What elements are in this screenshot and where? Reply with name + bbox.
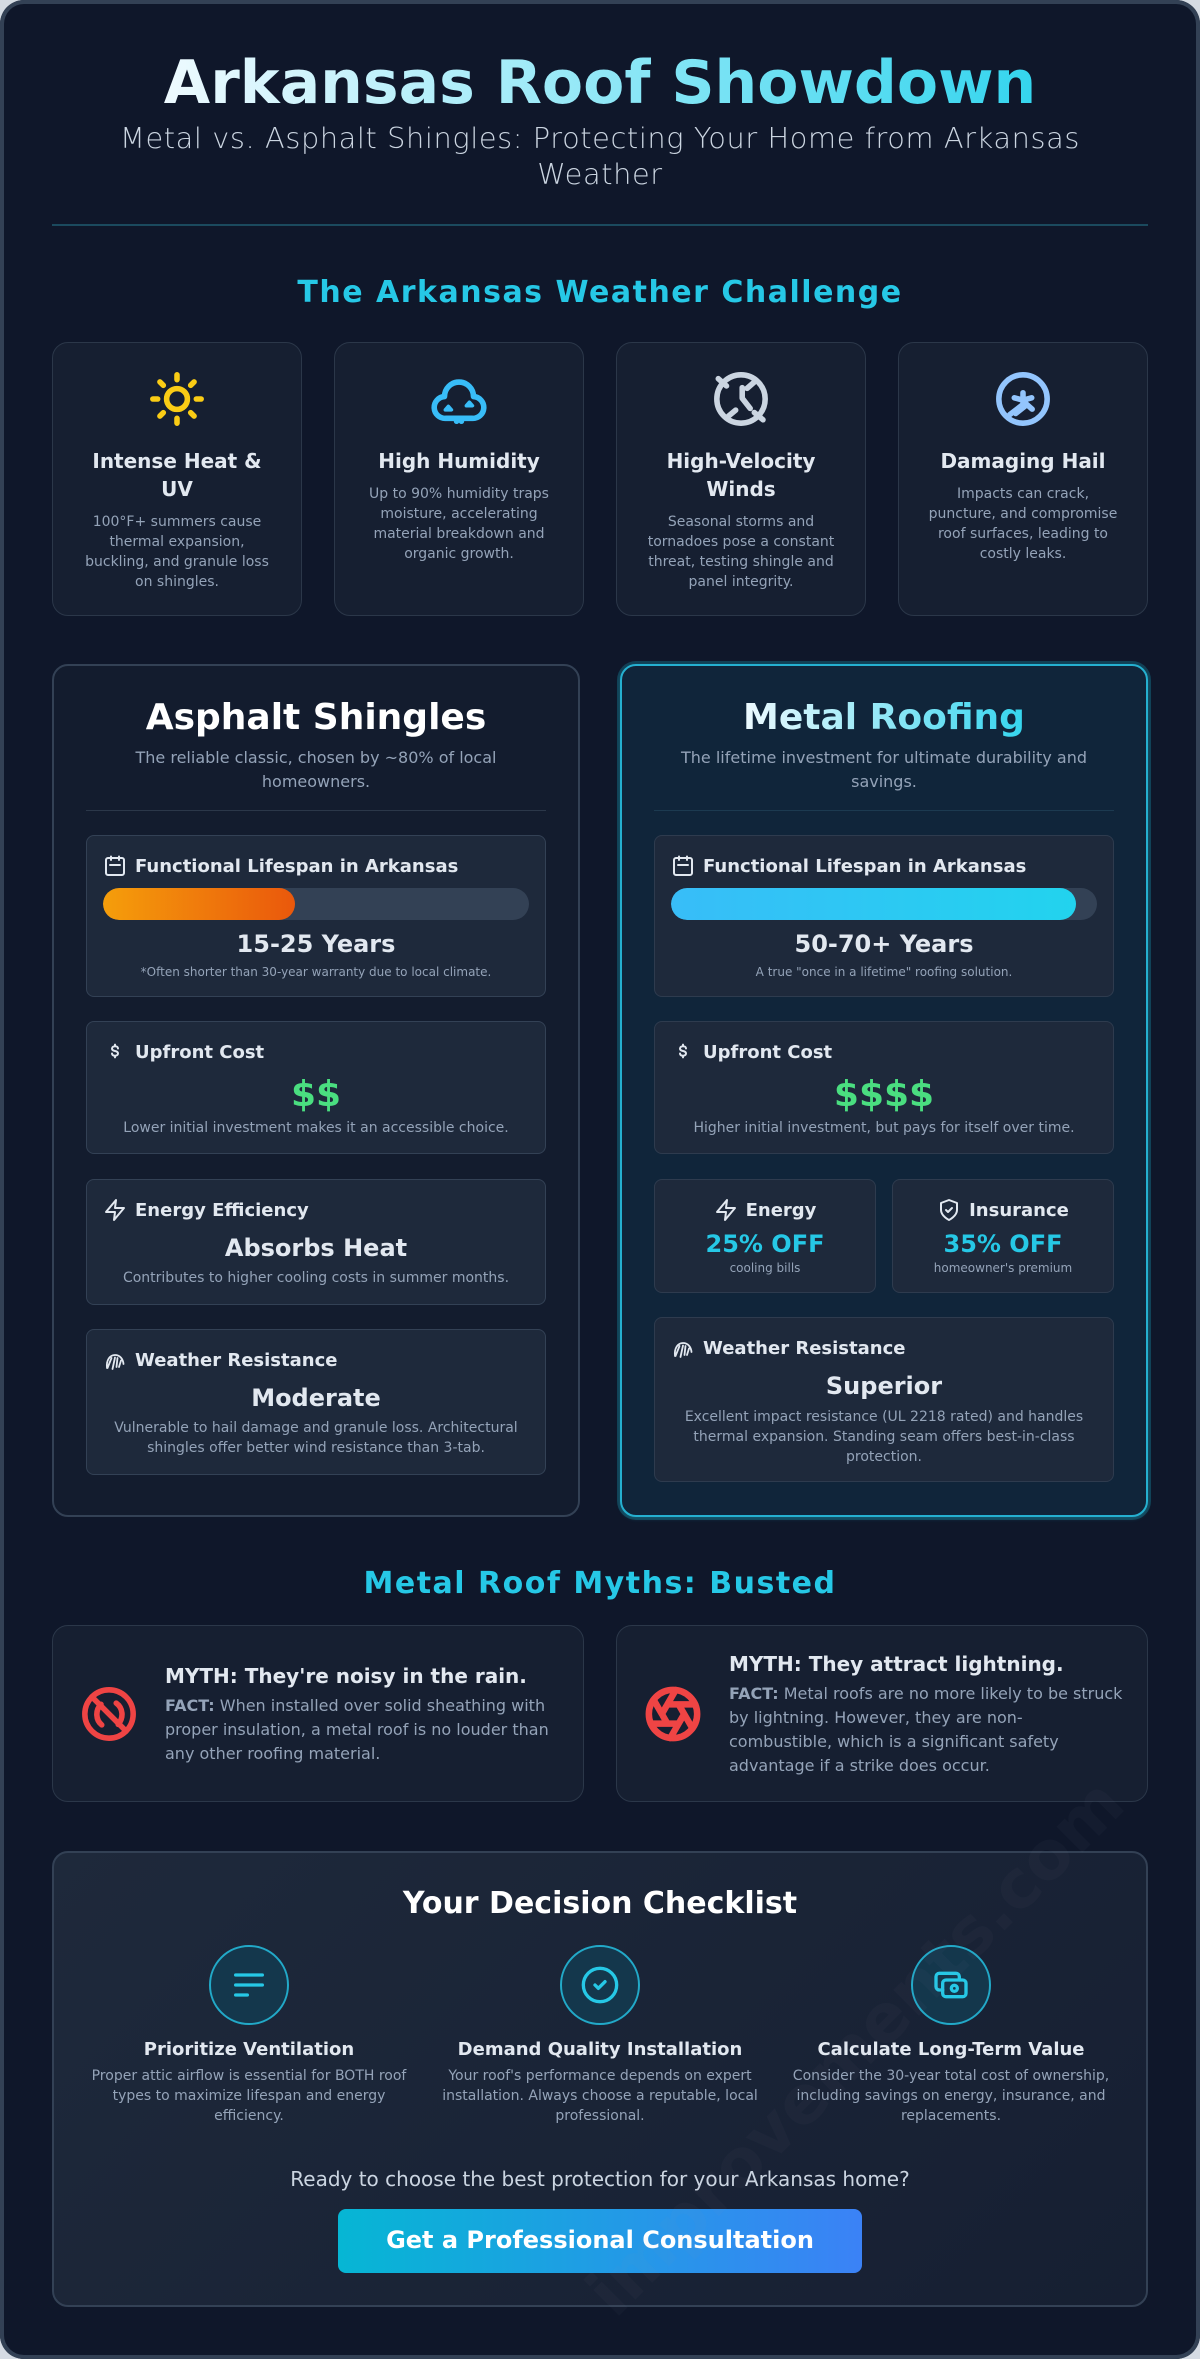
item text: value: Consider the 30-year total cost of ownership, — [793, 2068, 1109, 2084]
card text: panel integrity. — [689, 574, 793, 590]
item text: installation — [442, 2068, 758, 2124]
panel: noise myth — [52, 1625, 584, 1802]
item text: installation: Your roof's performance depends on expert — [448, 2068, 752, 2084]
panel intro: homeowners. — [262, 772, 370, 791]
metric: weather resistance — [654, 1317, 1114, 1482]
item text: value: replacements. — [901, 2108, 1001, 2124]
metric: energy savings — [654, 1179, 876, 1293]
card text: thermal expansion, — [109, 534, 245, 550]
insurance note: homeowner's premium — [934, 1261, 1072, 1275]
panel intro: The reliable classic, chosen by ~80% of local — [136, 748, 496, 767]
item heading: ventilation: Prioritize Ventilation — [144, 2039, 354, 2060]
energy discount: 25% OFF — [706, 1230, 824, 1258]
item text: ventilation: efficiency. — [214, 2108, 284, 2124]
metric label: Functional Lifespan in Arkansas — [703, 856, 1026, 877]
metric label: Functional Lifespan in Arkansas — [135, 856, 458, 877]
metric: upfront cost — [86, 1021, 546, 1154]
myth fact: combustible, which is a significant safety — [729, 1732, 1059, 1751]
title: Arkansas Roof Showdown — [164, 48, 1036, 118]
subtitle — [120, 121, 1080, 191]
card heading: High-Velocity — [667, 449, 815, 473]
lifespan bar — [103, 888, 529, 920]
icon: calendar — [105, 856, 125, 876]
panel: asphalt shingles — [52, 664, 580, 1517]
panel: intense heat card — [52, 342, 302, 616]
lifespan note: A true "once in a lifetime" roofing solution. — [756, 965, 1012, 979]
metric label: Upfront Cost — [135, 1042, 264, 1063]
card text: puncture, and compromise — [929, 506, 1117, 522]
lifespan value: 15-25 Years — [237, 930, 395, 958]
icon: wind clock — [714, 372, 768, 426]
icon: lightning bolt — [105, 1199, 125, 1221]
icon: dollar — [679, 1044, 687, 1058]
card text: costly leaks. — [980, 546, 1066, 562]
card text — [369, 486, 549, 562]
panel intro — [680, 748, 1087, 791]
icon: humid cloud — [431, 379, 487, 424]
resistance text: Vulnerable to hail damage and granule loss. Architectural — [114, 1420, 518, 1436]
icon: weather — [674, 1342, 692, 1358]
cost text: Lower initial investment makes it an accessible choice. — [123, 1120, 509, 1136]
cost text: Higher initial investment, but pays for itself over time. — [693, 1120, 1075, 1136]
item text: installation: installation. Always choose a reputable, local — [442, 2088, 758, 2104]
icon: quality check — [560, 1945, 640, 2025]
myth fact: any other roofing material. — [165, 1744, 380, 1763]
lifespan value: 50-70+ Years — [794, 930, 974, 958]
card text: threat, testing shingle and — [648, 554, 834, 570]
icon: hail — [996, 372, 1050, 426]
item text: value — [793, 2068, 1109, 2124]
card heading: Winds — [706, 477, 776, 501]
metric: upfront cost — [654, 1021, 1114, 1154]
myth fact: advantage if a strike does occur. — [729, 1756, 990, 1775]
heading: myths: Metal Roof Myths: Busted — [364, 1566, 836, 1601]
card heading — [667, 449, 815, 501]
panel intro — [135, 748, 496, 791]
card text: Seasonal storms and — [668, 514, 814, 530]
icon: dollar — [111, 1044, 119, 1058]
card text: 100°F+ summers cause — [93, 514, 261, 530]
subtitle: Weather — [537, 157, 663, 191]
icon: weather — [106, 1354, 124, 1370]
myth heading: MYTH: They're noisy in the rain. — [165, 1664, 527, 1688]
myth heading: MYTH: They attract lightning. — [729, 1652, 1064, 1676]
metric: energy efficiency — [86, 1179, 546, 1305]
panel heading: Asphalt Shingles — [146, 697, 486, 738]
metric: insurance savings — [892, 1179, 1114, 1293]
resistance value: Superior — [826, 1372, 942, 1400]
myth fact: FACT: When installed over solid sheathing with — [165, 1696, 545, 1715]
insurance discount: 35% OFF — [944, 1230, 1062, 1258]
button — [338, 2209, 862, 2273]
panel: decision checklist — [52, 1851, 1148, 2307]
panel heading: Metal Roofing — [743, 697, 1025, 738]
item text: value: including savings on energy, insurance, and — [796, 2088, 1106, 2104]
resistance value: Moderate — [251, 1384, 381, 1412]
panel: damaging hail card — [898, 342, 1148, 616]
energy heading with icon — [716, 1199, 816, 1221]
icon: lightning aperture — [646, 1686, 700, 1742]
myth fact: proper insulation, a metal roof is no louder than — [165, 1720, 549, 1739]
card text: moisture, accelerating — [380, 506, 538, 522]
energy note: cooling bills — [730, 1261, 800, 1275]
item heading: value: Calculate Long-Term Value — [817, 2039, 1085, 2060]
resistance text: shingles offer better wind resistance than 3-tab. — [147, 1440, 485, 1456]
energy heading with icon: Energy — [746, 1200, 816, 1221]
card text: material breakdown and — [373, 526, 545, 542]
card text: organic growth. — [404, 546, 514, 562]
button: Get a Professional Consultation — [386, 2226, 814, 2254]
lifespan note: *Often shorter than 30-year warranty due to local climate. — [141, 965, 491, 979]
card text — [648, 514, 834, 590]
icon: ventilation — [209, 1945, 289, 2025]
panel: metal roofing — [620, 664, 1148, 1517]
energy text: Contributes to higher cooling costs in summer months. — [123, 1270, 509, 1286]
card text: tornadoes pose a constant — [648, 534, 834, 550]
item text: installation: professional. — [555, 2108, 645, 2124]
subtitle: Metal vs. Asphalt Shingles: Protecting Your Home from Arkansas — [120, 121, 1080, 155]
card text: buckling, and granule loss — [85, 554, 269, 570]
myth fact: by lightning. However, they are non- — [729, 1708, 1023, 1727]
cost value: $$ — [291, 1074, 341, 1115]
card heading — [92, 449, 262, 501]
card text: Up to 90% humidity traps — [369, 486, 549, 502]
resistance text — [685, 1409, 1083, 1465]
icon: sun — [150, 372, 204, 426]
item heading: installation: Demand Quality Installation — [458, 2039, 742, 2060]
item text: ventilation — [92, 2068, 407, 2124]
card heading: High Humidity — [378, 449, 540, 473]
icon: no noise — [82, 1687, 136, 1741]
insurance heading with icon: Insurance — [969, 1200, 1069, 1221]
panel: high humidity card — [334, 342, 584, 616]
resistance text: Excellent impact resistance (UL 2218 rated) and handles — [685, 1409, 1083, 1425]
watermark: improvements.com — [571, 1763, 1139, 2331]
card text: on shingles. — [135, 574, 219, 590]
icon: calendar — [673, 856, 693, 876]
panel intro: The lifetime investment for ultimate durability and — [681, 748, 1087, 767]
item text: ventilation: types to maximize lifespan and energy — [113, 2088, 385, 2104]
item text: ventilation: Proper attic airflow is essential for BOTH roof — [92, 2068, 406, 2084]
icon: banknotes — [911, 1945, 991, 2025]
metric: lifespan — [86, 835, 546, 997]
energy value: Absorbs Heat — [225, 1234, 407, 1262]
panel: lightning myth — [616, 1625, 1148, 1802]
metric: lifespan — [654, 835, 1114, 997]
card text — [929, 486, 1117, 562]
resistance text: protection. — [846, 1449, 922, 1465]
call to action prompt: Ready to choose the best protection for your Arkansas home? — [290, 2167, 910, 2191]
card text: Impacts can crack, — [957, 486, 1089, 502]
cost value: $$$$ — [834, 1074, 934, 1115]
card text — [85, 514, 269, 590]
myth fact — [165, 1696, 549, 1763]
panel intro: savings. — [851, 772, 917, 791]
myth fact: FACT: Metal roofs are no more likely to be struck — [729, 1684, 1122, 1703]
resistance text — [114, 1420, 518, 1456]
metric label: Weather Resistance — [135, 1350, 337, 1371]
card text: roof surfaces, leading to — [938, 526, 1108, 542]
resistance text: thermal expansion. Standing seam offers best-in-class — [693, 1429, 1075, 1445]
checklist heading: Your Decision Checklist — [403, 1886, 797, 1921]
lifespan bar — [671, 888, 1097, 920]
metric: weather resistance — [86, 1329, 546, 1475]
card heading: Intense Heat & — [92, 449, 262, 473]
card heading: Damaging Hail — [940, 449, 1106, 473]
metric label: Weather Resistance — [703, 1338, 905, 1359]
heading: weather challenge: The Arkansas Weather Challenge — [297, 275, 903, 310]
panel: high-velocity winds card — [616, 342, 866, 616]
metric label: Upfront Cost — [703, 1042, 832, 1063]
card heading: UV — [161, 477, 193, 501]
myth fact — [729, 1684, 1122, 1775]
metric label: Energy Efficiency — [135, 1200, 309, 1221]
